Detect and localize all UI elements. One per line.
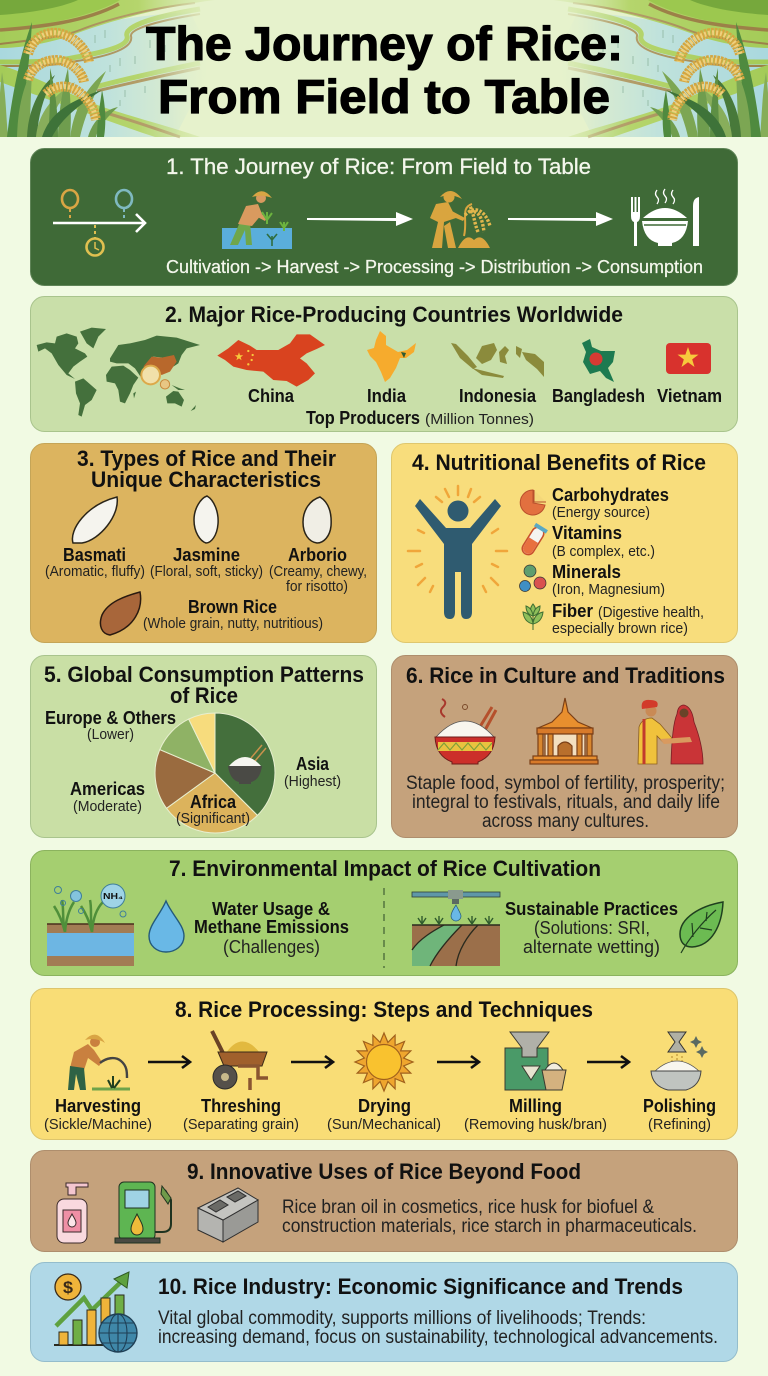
item: (Separating grain) bbox=[183, 1116, 299, 1133]
text block bbox=[406, 773, 725, 832]
item bbox=[327, 1096, 441, 1133]
item bbox=[552, 523, 655, 560]
title bbox=[146, 17, 623, 123]
icon: economic growth chart bbox=[54, 1272, 137, 1352]
label: Americas: (Moderate) bbox=[73, 798, 142, 815]
item bbox=[269, 545, 367, 595]
icon: flooded paddy with methane: NH₄ bbox=[103, 891, 123, 901]
subtitle: Top Producers bbox=[306, 408, 420, 428]
label: Africa bbox=[176, 792, 250, 827]
panel 2: producers bbox=[30, 296, 738, 432]
item bbox=[45, 545, 145, 580]
label: Africa: Africa bbox=[190, 792, 237, 812]
item: Basmati bbox=[63, 545, 126, 565]
panel 3: rice types bbox=[30, 444, 376, 642]
item: Carbohydrates bbox=[552, 485, 669, 505]
item: Minerals bbox=[552, 562, 621, 582]
icon: water drop bbox=[149, 901, 184, 952]
item: Polishing bbox=[643, 1096, 716, 1116]
header: rice terrace banner bbox=[0, 0, 768, 137]
panel 10: economics bbox=[30, 1262, 738, 1362]
item bbox=[643, 1096, 716, 1133]
icon: vitamin vial bbox=[519, 523, 548, 557]
item: (Floral, soft, sticky) bbox=[150, 563, 263, 580]
text block: Vital global commodity, supports millions of livelihoods; Trends: bbox=[158, 1308, 646, 1329]
Bangladesh map bbox=[582, 339, 615, 382]
item: Milling bbox=[509, 1096, 562, 1116]
item: especially brown rice) bbox=[552, 620, 688, 637]
heading: 7. Environmental Impact of Rice Cultivation bbox=[169, 856, 601, 881]
challenge text bbox=[194, 899, 349, 957]
panel 6: culture bbox=[392, 656, 738, 838]
item bbox=[552, 485, 669, 521]
item: Arborio bbox=[288, 545, 347, 565]
icon: timeline bbox=[53, 190, 145, 256]
heading: 3. Types of Rice and Their bbox=[77, 446, 336, 471]
heading: of Rice bbox=[170, 683, 238, 708]
sustainable text: (Solutions: SRI, bbox=[534, 918, 650, 938]
left rice terrace and plants bbox=[0, 0, 215, 137]
highlight: Asia rice region bbox=[143, 355, 177, 375]
item: (B complex, etc.) bbox=[552, 543, 655, 560]
title: From Field to Table bbox=[158, 70, 610, 123]
label: Bangladesh bbox=[552, 386, 645, 406]
subtitle: (Million Tonnes) bbox=[425, 411, 534, 428]
item bbox=[464, 1096, 607, 1133]
icon: construction block bbox=[198, 1188, 258, 1242]
item: (Sun/Mechanical) bbox=[327, 1116, 441, 1133]
item: Harvesting bbox=[55, 1096, 141, 1116]
icon: arborio grain bbox=[303, 497, 331, 543]
item bbox=[552, 562, 665, 598]
Vietnam flag bbox=[666, 343, 711, 374]
icon: harvesting farmer bbox=[68, 1035, 130, 1090]
heading: 6. Rice in Culture and Traditions bbox=[406, 663, 725, 688]
heading: 9. Innovative Uses of Rice Beyond Food bbox=[187, 1159, 581, 1184]
sustainable text bbox=[505, 899, 678, 957]
heading: 10. Rice Industry: Economic Significance and Trends bbox=[158, 1274, 683, 1299]
item: for risotto) bbox=[286, 578, 348, 595]
subtitle bbox=[306, 408, 534, 428]
icon: fiber plant bbox=[523, 604, 543, 630]
China map bbox=[217, 334, 325, 387]
icon: basmati grain bbox=[72, 497, 117, 543]
item: (Sickle/Machine) bbox=[44, 1116, 152, 1133]
arrow bbox=[508, 212, 613, 226]
text block: increasing demand, focus on sustainability, technological advancements. bbox=[158, 1327, 718, 1348]
item: (Creamy, chewy, bbox=[269, 563, 367, 580]
icon: cosmetic bottle bbox=[57, 1183, 88, 1243]
label: Vietnam bbox=[657, 386, 722, 406]
label: Asia: Asia bbox=[296, 754, 330, 774]
icon: wedding couple bbox=[638, 700, 703, 764]
item bbox=[183, 1096, 299, 1133]
label: Asia: (Highest) bbox=[284, 773, 341, 790]
sustainable text: Sustainable Practices bbox=[505, 899, 678, 919]
arrow bbox=[587, 1056, 629, 1068]
icon: minerals bbox=[520, 565, 546, 592]
item: Brown Rice bbox=[188, 597, 277, 617]
challenge text: Water Usage & bbox=[212, 899, 330, 919]
icon: bowl bbox=[228, 745, 266, 784]
label: Indonesia bbox=[459, 386, 537, 406]
icon: thresher bbox=[212, 1031, 268, 1090]
item: (Energy source) bbox=[552, 504, 650, 521]
icon: brown rice grain bbox=[100, 592, 141, 635]
icon: leaf bbox=[680, 902, 723, 953]
panel 5: consumption bbox=[30, 656, 376, 838]
arrow bbox=[148, 1056, 190, 1068]
label: Europe bbox=[45, 708, 176, 743]
panel 9: innovative uses bbox=[30, 1150, 738, 1252]
heading bbox=[44, 662, 364, 708]
caption: Cultivation -> Harvest -> Processing -> Distribution -> Consumption bbox=[166, 257, 703, 277]
arrow bbox=[307, 212, 413, 226]
right rice terrace and plants bbox=[553, 0, 768, 137]
text block: Rice bran oil in cosmetics, rice husk for biofuel & bbox=[282, 1197, 654, 1218]
heading: 2. Major Rice-Producing Countries Worldwide bbox=[165, 302, 623, 327]
panel 1: journey bbox=[30, 148, 738, 286]
challenge text: (Challenges) bbox=[223, 937, 320, 957]
heading: 8. Rice Processing: Steps and Techniques bbox=[175, 997, 593, 1022]
Indonesia map bbox=[451, 343, 544, 378]
item bbox=[552, 601, 704, 637]
item: (Iron, Magnesium) bbox=[552, 581, 665, 598]
icon: economic growth chart: $ bbox=[63, 1278, 74, 1297]
India map bbox=[367, 331, 416, 382]
text block bbox=[158, 1308, 718, 1348]
item: Jasmine bbox=[173, 545, 240, 565]
icon: farmer harvesting bbox=[430, 191, 490, 248]
sustainable text: alternate wetting) bbox=[523, 937, 660, 957]
label: China bbox=[248, 386, 295, 406]
item: (Digestive health, bbox=[598, 604, 704, 621]
title: The Journey of Rice: bbox=[146, 17, 623, 70]
icon: polishing bowl bbox=[651, 1032, 708, 1090]
text block: across many cultures. bbox=[482, 811, 649, 832]
icon: carbohydrate pie bbox=[520, 490, 546, 515]
item: (Aromatic, fluffy) bbox=[45, 563, 145, 580]
panel 7: environment bbox=[30, 850, 738, 976]
arrow bbox=[437, 1056, 479, 1068]
icon: festive rice bowl bbox=[435, 699, 496, 764]
icon: flooded paddy with methane bbox=[47, 884, 134, 966]
icon: farmer planting bbox=[222, 191, 292, 249]
label: Asia bbox=[284, 754, 341, 790]
item: Vitamins bbox=[552, 523, 622, 543]
label: Africa: (Significant) bbox=[176, 810, 250, 827]
label: Europe: Europe & Others bbox=[45, 708, 176, 728]
item: Drying bbox=[358, 1096, 411, 1116]
label: Europe: (Lower) bbox=[87, 726, 134, 743]
arrow bbox=[291, 1056, 333, 1068]
icon: drip irrigation field bbox=[412, 890, 500, 966]
item bbox=[150, 545, 263, 580]
icon: jasmine grain bbox=[194, 496, 218, 543]
label: Americas bbox=[70, 779, 145, 815]
label: Americas: Americas bbox=[70, 779, 145, 799]
text block: integral to festivals, rituals, and daily life bbox=[412, 792, 720, 813]
icon: temple bbox=[530, 698, 598, 764]
heading bbox=[77, 446, 336, 492]
item: Fiber bbox=[552, 601, 593, 621]
world map bbox=[37, 328, 200, 417]
heading: 5. Global Consumption Patterns bbox=[44, 662, 364, 687]
text block: construction materials, rice starch in pharmaceuticals. bbox=[282, 1216, 697, 1237]
pie chart bbox=[155, 713, 275, 833]
heading: 1. The Journey of Rice: From Field to Table bbox=[166, 154, 591, 179]
label: India bbox=[367, 386, 407, 406]
item: (Refining) bbox=[648, 1116, 711, 1133]
text block bbox=[282, 1197, 697, 1237]
item bbox=[44, 1096, 152, 1133]
icon: milling machine bbox=[505, 1032, 566, 1090]
item bbox=[143, 597, 323, 632]
icon: healthy person with rays bbox=[408, 486, 507, 619]
icon: sun bbox=[355, 1033, 413, 1091]
item: (Removing husk/bran) bbox=[464, 1116, 607, 1133]
heading: 4. Nutritional Benefits of Rice bbox=[412, 450, 706, 475]
text block: Staple food, symbol of fertility, prosperity; bbox=[406, 773, 725, 794]
icon: rice bowl with fork and knife bbox=[631, 189, 699, 246]
item: (Whole grain, nutty, nutritious) bbox=[143, 615, 323, 632]
icon: biofuel pump bbox=[115, 1182, 171, 1243]
challenge text: Methane Emissions bbox=[194, 917, 349, 937]
panel 8: processing bbox=[30, 988, 738, 1140]
heading: Unique Characteristics bbox=[91, 467, 321, 492]
panel 4: nutrition bbox=[392, 444, 738, 642]
item: Threshing bbox=[201, 1096, 281, 1116]
